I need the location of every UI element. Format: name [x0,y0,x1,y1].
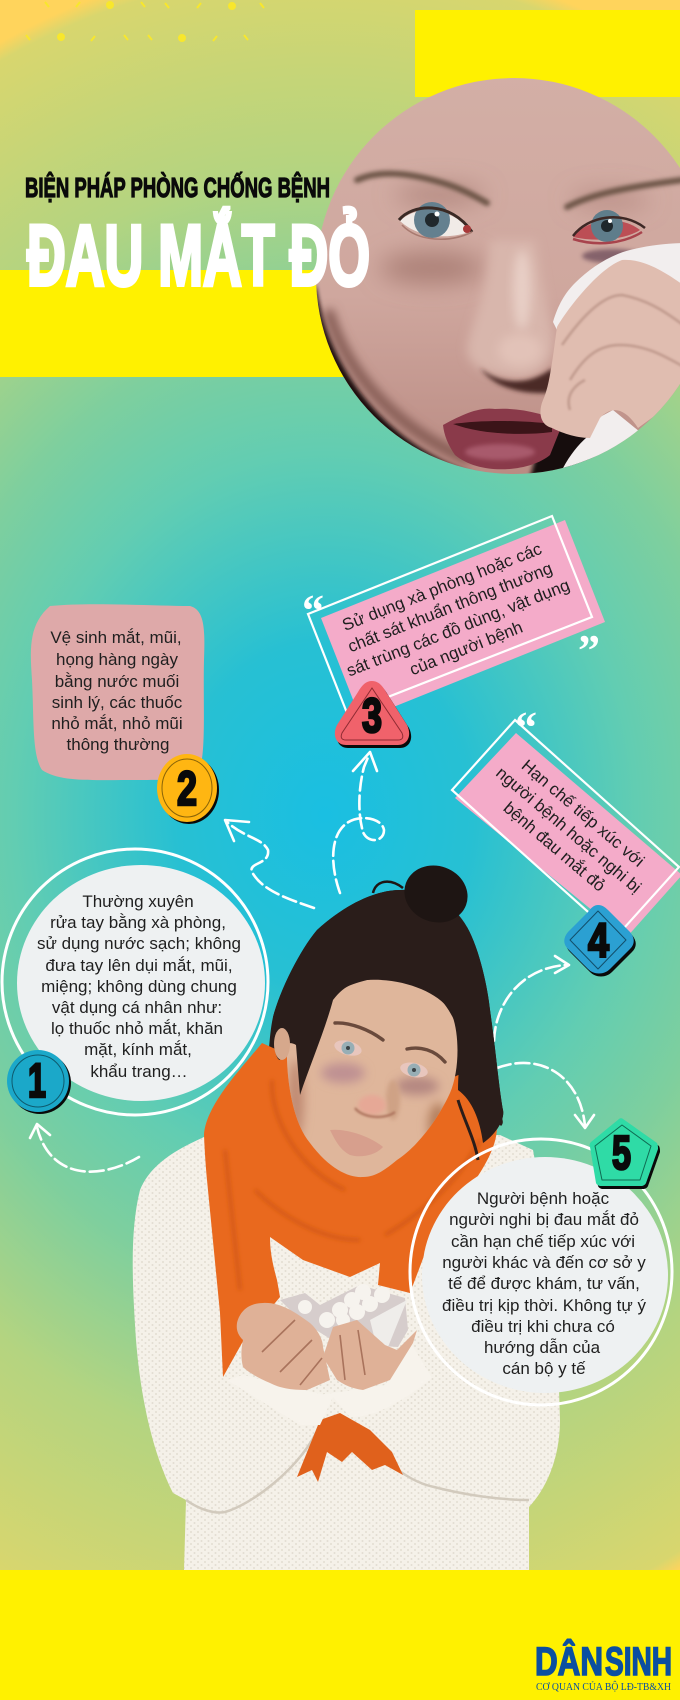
scarf [204,1043,497,1377]
bubble 5 text: người nghi bị đau mắt đỏ [449,1210,639,1229]
box 2 text: thông thường [67,735,169,754]
box 2 text: bằng nước muối [55,672,179,691]
bubble 5 outline [410,1139,672,1405]
finger lines [262,1320,365,1385]
logo tagline: CƠ QUAN CỦA BỘ LĐ-TB&XH [536,1681,671,1693]
hair front [273,890,503,1143]
box 2 text: họng hàng ngày [56,650,178,669]
card 3 text: sát trùng các đồ dùng, vật dụng [344,575,572,680]
sweater sleeve folds [186,1420,529,1512]
hair back [263,890,503,1143]
mouth [330,1130,383,1156]
arrow: to step 3 [333,752,384,893]
cupped hands [237,1303,417,1390]
left eye [399,202,472,239]
badge 3: 3 [362,690,382,743]
bubble 1 text: rửa tay bằng xà phòng, [50,913,226,932]
bubble 5 fill [422,1157,668,1393]
card 4 text [478,746,659,914]
badge 4: 4 [588,915,609,968]
bubble 1 text: vật dụng cá nhân như: [52,998,222,1017]
step 3: pink tilted card [302,516,605,720]
bubble 1 text [37,892,241,1081]
arrow: to step 1 [30,1124,139,1172]
pills blister [280,1284,408,1347]
eyebrows [357,174,680,207]
nose [467,240,556,393]
step 2: rose box [31,604,204,780]
badge 1 [7,1050,71,1114]
arrow: to step 2 [225,820,314,908]
scarf folds [225,1080,480,1290]
eyes [333,1038,429,1080]
yellow block: top right [415,10,680,97]
face [287,980,458,1177]
bubble 5 text [442,1189,646,1378]
step 1: white bubble [2,849,268,1115]
bubble 5 text: cán bộ y tế [502,1359,586,1378]
card 3 text [328,534,580,701]
logo: Dân Sinh [535,1638,672,1693]
bubble 5 text: điều trị khi chưa có [471,1317,615,1336]
cheek shading and dark under-eye circles [288,1059,445,1134]
bubble 1 text: mặt, kính mắt, [84,1040,192,1059]
bubble 1 text: miệng; không dùng chung [41,977,237,996]
badge 5: 5 [612,1127,631,1180]
card 4 text: Hạn chế tiếp xúc với [518,756,648,871]
hair loop [373,882,403,893]
quote marks: “ [302,586,324,635]
card 4 outline [452,720,679,937]
hair strand [458,1100,501,1160]
step 4: pink tilted card [452,703,680,938]
badge 5 [590,1118,660,1189]
eyebrows [335,1023,445,1062]
decorative confetti dots [26,2,264,41]
bubble 5 text: người khác và đến cơ sở y [442,1253,646,1272]
lips [443,409,600,478]
yellow band behind title [0,270,345,377]
woman with scarf holding pills [133,857,560,1570]
badge 1: 1 [28,1055,46,1108]
bottom yellow band [0,1570,680,1700]
card 3 text: chất sát khuẩn thông thường [345,559,555,656]
title [25,171,370,304]
bubble 1 text: đưa tay lên dụi mắt, mũi, [45,956,233,975]
card 3 text: của người bệnh [407,618,525,679]
photo: close-up of face with red eye [310,70,680,480]
quote marks [302,586,600,675]
eye socket and under-eye shadows [380,185,650,284]
hair bun [396,857,476,931]
tissue [553,243,680,330]
box 2 text [50,628,183,754]
bubble 1 text: khẩu trang… [90,1062,188,1081]
quote mark: “ [515,703,537,752]
card 3 text: Sử dụng xà phòng hoặc các [340,539,545,635]
sweater cuffs [227,1345,432,1425]
bubble 1 text: sử dụng nước sạch; không [37,934,241,953]
arrow: to step 4 [494,956,569,1041]
bubble 5 text: hướng dẫn của [484,1338,601,1357]
bubble 1 text: lọ thuốc nhỏ mắt, khăn [51,1019,223,1038]
bubble 5 text: Người bệnh hoặc [477,1189,610,1208]
card 4 text: bệnh đau mắt đỏ [500,798,609,895]
badge 2 [157,754,219,824]
box 2 text: Vệ sinh mắt, mũi, [50,628,182,647]
logo wordmark part 1: DÂN [535,1638,603,1684]
bubble 5 text: điều trị kịp thời. Không tự ý [442,1296,646,1315]
card 3 outline [308,516,592,713]
bubble 5 text: tế để được khám, tư vấn, [448,1274,640,1293]
badge 4 [564,905,636,976]
badge 3 [335,681,411,748]
hand holding tissue [540,260,680,438]
bubble 1 outline [2,849,268,1115]
nose [355,1080,400,1120]
sweater [133,1135,560,1570]
arrow: to step 5 [497,1063,594,1128]
box 2 text: nhỏ mắt, nhỏ mũi [51,714,183,733]
bubble 1 fill [17,865,265,1101]
bubble 5 text: cần hạn chế tiếp xúc với [451,1232,635,1251]
title line 1: BIỆN PHÁP PHÒNG CHỐNG BỆNH [25,171,330,203]
box 2 text: sinh lý, các thuốc [52,693,183,712]
badge 2: 2 [177,763,197,816]
ear [274,1028,290,1060]
bubble 1 text: Thường xuyên [82,892,194,911]
quote marks: ” [578,626,600,675]
scarf fringe [297,1413,403,1482]
left dark edge of face [316,284,468,468]
step 5: white bubble [410,1139,672,1405]
right red eye [573,210,645,263]
title line 2: ĐAU MẮT ĐỎ [27,208,370,304]
card 4 text: người bệnh hoặc nghi bị [492,763,645,897]
